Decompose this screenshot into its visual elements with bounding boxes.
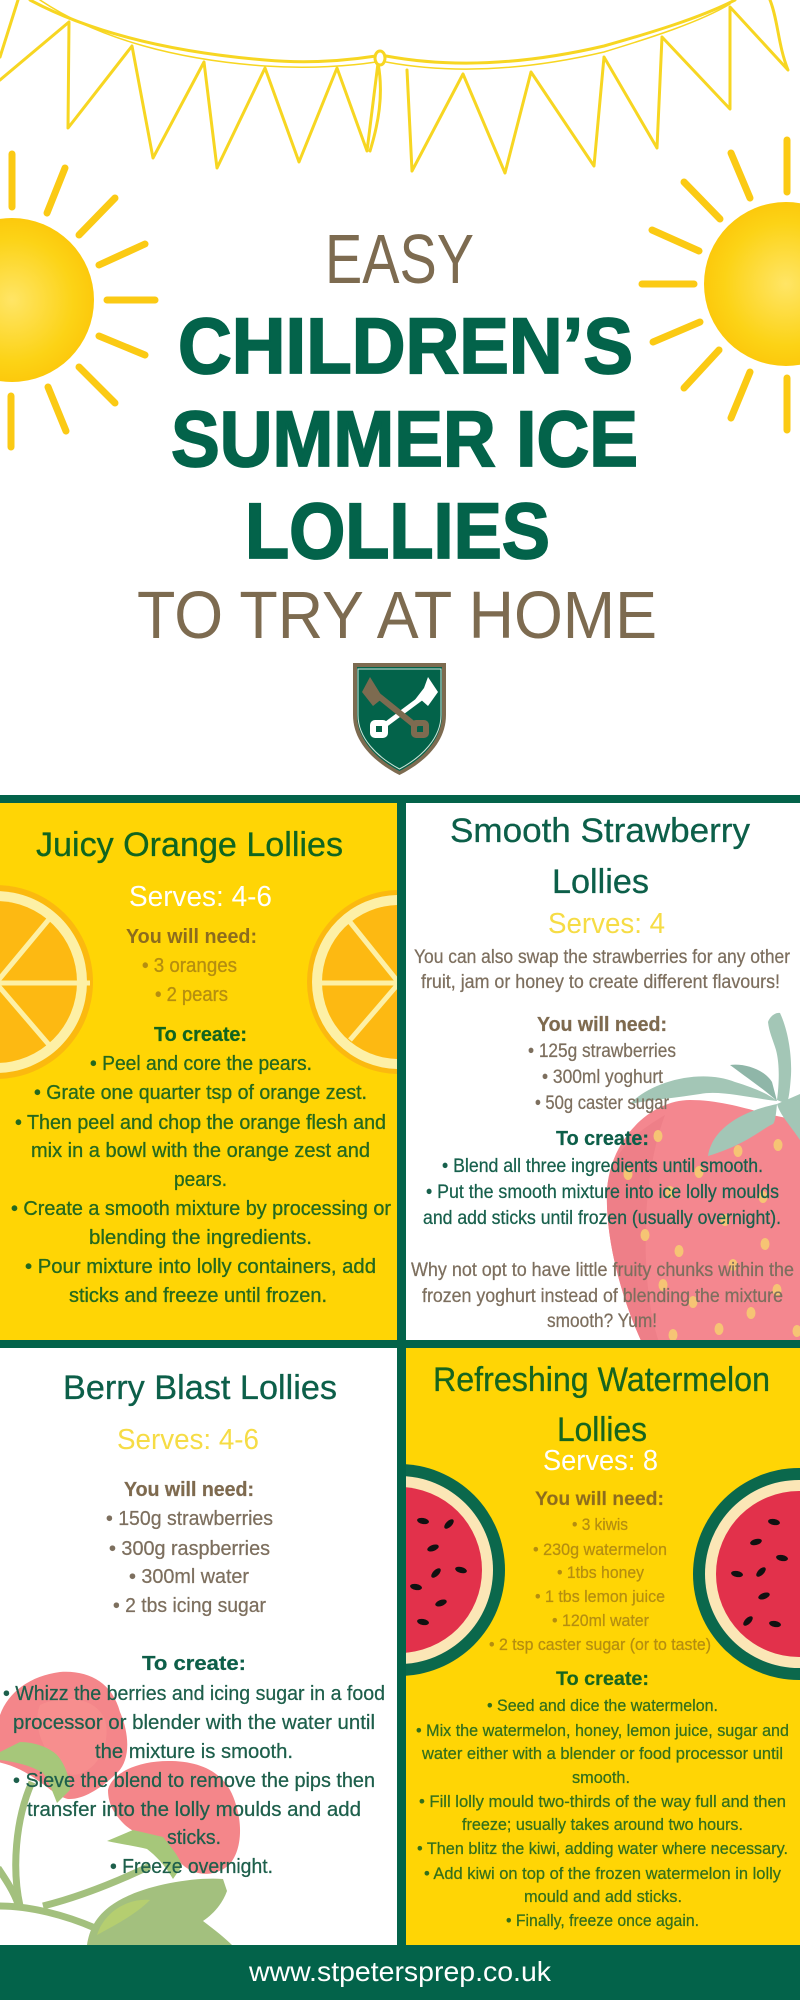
- heading: Lollies: [557, 1411, 647, 1449]
- intro note: [414, 947, 791, 993]
- ingredients: [126, 926, 257, 1006]
- method: freeze; usually takes around two hours.: [462, 1815, 743, 1834]
- closing tip: [411, 1260, 794, 1332]
- method: smooth.: [572, 1768, 630, 1787]
- ingredients: • 1 tbs lemon juice: [535, 1587, 665, 1606]
- icon: left orange slice: [0, 885, 93, 1079]
- ingredients: • 120ml water: [552, 1611, 649, 1630]
- ingredients: • 300ml yoghurt: [542, 1067, 664, 1088]
- method: • Freeze overnight.: [110, 1856, 273, 1878]
- method: sticks and freeze until frozen.: [69, 1285, 327, 1307]
- method: blending the ingredients.: [89, 1227, 312, 1249]
- method: • Peel and core the pears.: [90, 1053, 312, 1075]
- icon: left sun: [0, 154, 155, 447]
- method: the mixture is smooth.: [95, 1741, 293, 1763]
- panel: smooth strawberry lollies: [406, 803, 800, 1345]
- intro note: fruit, jam or honey to create different flavours!: [421, 972, 780, 993]
- ingredients: You will need:: [124, 1479, 254, 1501]
- method: [423, 1128, 781, 1229]
- website address: www.stpetersprep.co.uk: [248, 1956, 552, 1987]
- icon: raspberries and leaves: [0, 1672, 240, 1945]
- method: [11, 1024, 391, 1307]
- method: sticks.: [167, 1827, 221, 1849]
- icon: left watermelon slice: [406, 1464, 505, 1676]
- ingredients: • 3 kiwis: [572, 1515, 628, 1534]
- icon: right sun: [642, 140, 800, 430]
- method: To create:: [556, 1128, 649, 1150]
- method: • Finally, freeze once again.: [506, 1911, 699, 1930]
- method: • Then blitz the kiwi, adding water where necessary.: [417, 1839, 788, 1858]
- panel: refreshing watermelon lollies: [406, 1348, 800, 1945]
- title: EASY: [325, 220, 474, 298]
- ingredients: • 300ml water: [129, 1566, 249, 1588]
- serves: Serves: 8: [543, 1445, 658, 1477]
- serves: Serves: 4-6: [117, 1424, 259, 1456]
- ingredients: • 2 tsp caster sugar (or to taste): [489, 1635, 711, 1654]
- ingredients: • 230g watermelon: [533, 1540, 667, 1559]
- method: and add sticks until frozen (usually overnight).: [423, 1208, 781, 1229]
- method: transfer into the lolly moulds and add: [27, 1799, 361, 1821]
- ingredients: • 125g strawberries: [528, 1041, 676, 1062]
- ingredients: • 2 pears: [155, 984, 228, 1006]
- ingredients: • 2 tbs icing sugar: [113, 1595, 266, 1617]
- ingredients: • 50g caster sugar: [535, 1093, 670, 1114]
- method: • Then peel and chop the orange flesh and: [15, 1112, 386, 1134]
- method: • Whizz the berries and icing sugar in a food: [3, 1683, 385, 1705]
- method: [3, 1653, 385, 1878]
- heading: Refreshing Watermelon: [433, 1361, 770, 1399]
- title: [137, 220, 657, 653]
- heading: Juicy Orange Lollies: [36, 826, 343, 864]
- heading: [450, 812, 750, 901]
- method: • Seed and dice the watermelon.: [487, 1696, 718, 1715]
- heading: Smooth Strawberry: [450, 812, 750, 850]
- ingredients: [106, 1479, 273, 1617]
- panel: berry blast lollies: [0, 1348, 397, 1945]
- method: • Put the smooth mixture into ice lolly moulds: [426, 1182, 779, 1203]
- method: • Create a smooth mixture by processing or: [11, 1198, 391, 1220]
- closing tip: smooth? Yum!: [547, 1311, 657, 1332]
- method: mould and add sticks.: [524, 1887, 682, 1906]
- title: SUMMER ICE: [171, 394, 638, 483]
- method: water either with a blender or food processor until: [421, 1744, 783, 1763]
- icon: right watermelon slice: [693, 1468, 800, 1680]
- method: • Fill lolly mould two-thirds of the way full and then: [419, 1792, 786, 1811]
- method: pears.: [174, 1169, 227, 1191]
- ingredients: • 1tbs honey: [557, 1563, 644, 1582]
- ingredients: • 3 oranges: [142, 955, 237, 977]
- heading: Lollies: [552, 863, 649, 901]
- icon: right orange slice: [307, 890, 397, 1074]
- title: CHILDREN’S: [178, 301, 633, 390]
- icon: school crest: [353, 663, 446, 775]
- ingredients: • 300g raspberries: [109, 1538, 270, 1560]
- footer band: [0, 1945, 800, 2000]
- method: • Mix the watermelon, honey, lemon juice, sugar and: [416, 1721, 789, 1740]
- panel: juicy orange lollies: [0, 803, 397, 1340]
- method: To create:: [142, 1653, 246, 1675]
- method: • Sieve the blend to remove the pips then: [13, 1770, 375, 1792]
- method: To create:: [154, 1024, 247, 1046]
- ingredients: You will need:: [535, 1489, 664, 1510]
- heading: [433, 1361, 770, 1449]
- method: To create:: [556, 1669, 649, 1690]
- bunting: [0, 0, 788, 173]
- icon: strawberry: [607, 1013, 800, 1345]
- method: • Add kiwi on top of the frozen watermelon in lolly: [424, 1864, 781, 1883]
- heading: Berry Blast Lollies: [63, 1369, 337, 1407]
- ingredients: [528, 1014, 676, 1114]
- method: • Pour mixture into lolly containers, add: [25, 1256, 376, 1278]
- method: [416, 1669, 789, 1930]
- title: LOLLIES: [245, 486, 550, 575]
- serves: Serves: 4-6: [129, 881, 272, 913]
- title: TO TRY AT HOME: [137, 578, 657, 653]
- ingredients: [489, 1489, 711, 1654]
- serves: Serves: 4: [548, 908, 665, 940]
- green grid frame: [0, 795, 800, 1945]
- method: • Blend all three ingredients until smooth.: [442, 1156, 763, 1177]
- ingredients: You will need:: [126, 926, 257, 948]
- method: • Grate one quarter tsp of orange zest.: [34, 1082, 367, 1104]
- closing tip: frozen yoghurt instead of blending the mixture: [422, 1286, 783, 1307]
- ingredients: You will need:: [537, 1014, 667, 1036]
- method: mix in a bowl with the orange zest and: [31, 1140, 370, 1162]
- method: processor or blender with the water until: [13, 1712, 375, 1734]
- ingredients: • 150g strawberries: [106, 1508, 273, 1530]
